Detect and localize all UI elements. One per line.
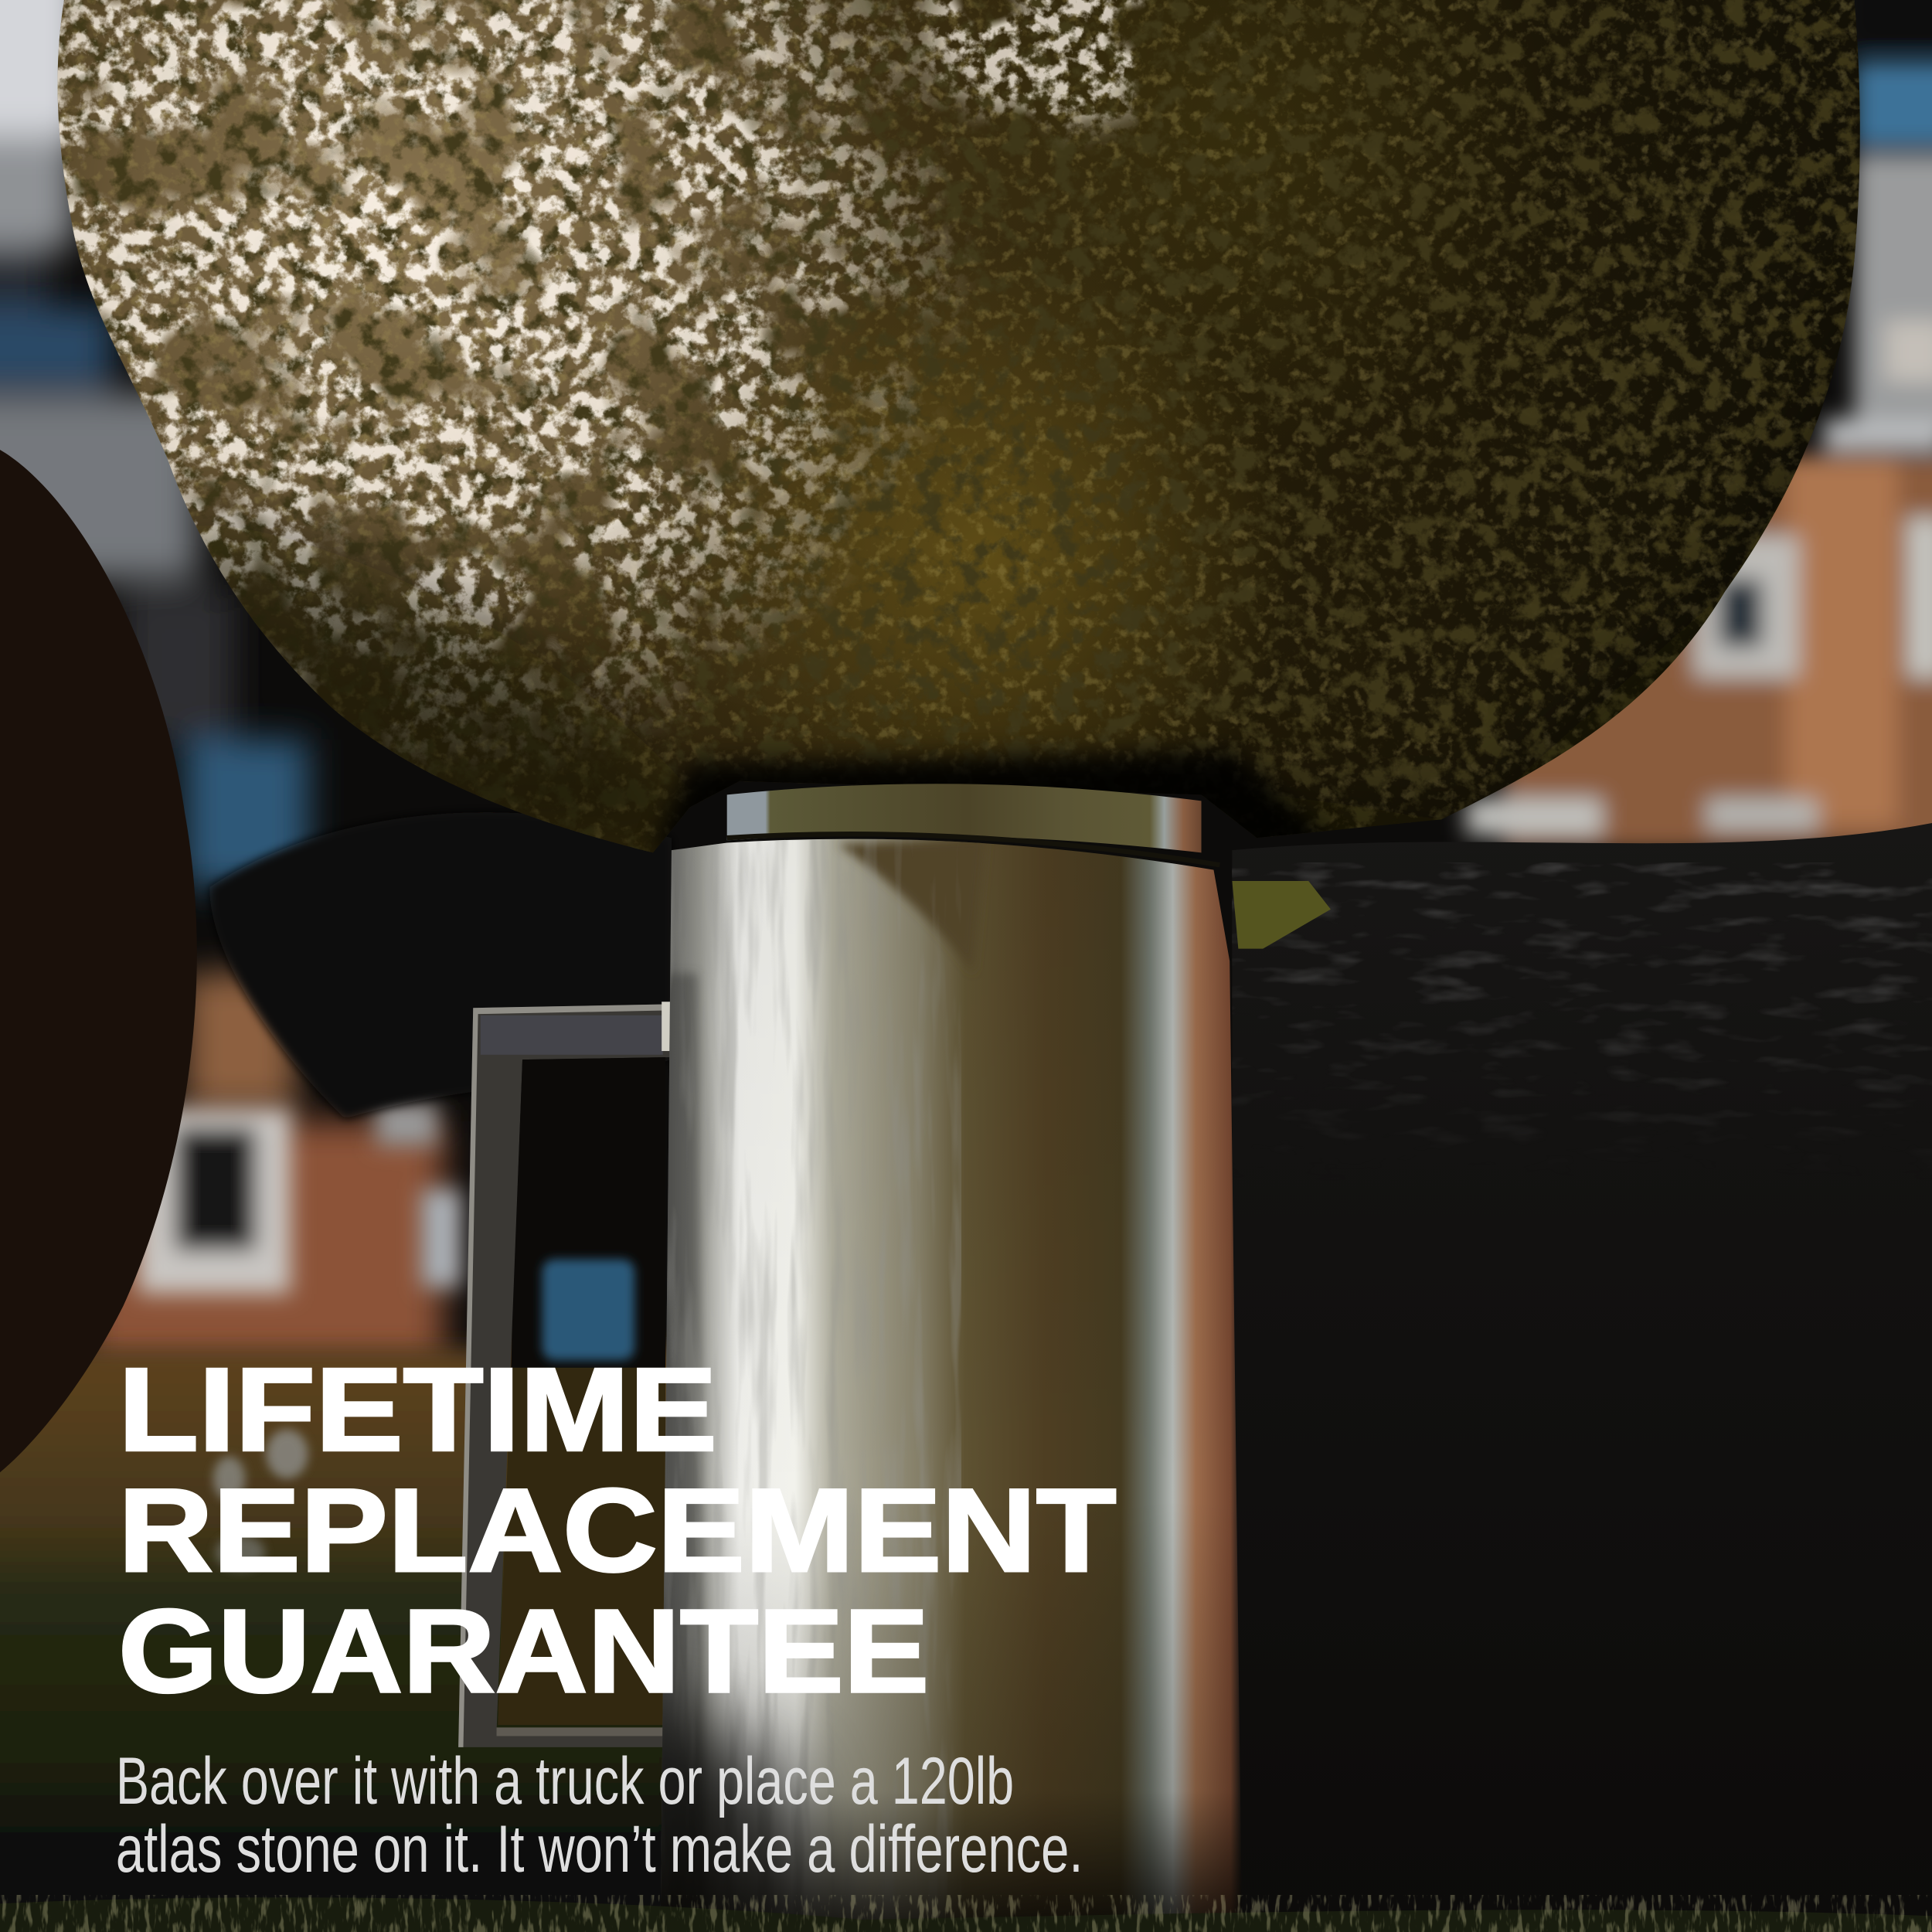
subtitle: Back over it with a truck or place a 120lb xyxy=(116,1744,1014,1818)
mug body xyxy=(628,825,1244,1932)
atlas stone xyxy=(0,0,1932,862)
blurred window left xyxy=(138,1103,461,1294)
ground xyxy=(0,1349,690,1932)
blurred lights xyxy=(213,1429,308,1570)
mug handle xyxy=(458,1002,672,1747)
title xyxy=(118,1344,1117,1717)
subtitle: atlas stone on it. It won’t make a difference. xyxy=(116,1812,1083,1886)
dark stone behind mug xyxy=(209,812,672,1119)
subtitle xyxy=(116,1744,1083,1886)
tire right xyxy=(1232,823,1932,1162)
building right xyxy=(1466,0,1932,850)
grass xyxy=(0,1895,1932,1932)
handle opening xyxy=(498,1057,665,1725)
mug lid xyxy=(727,784,1219,865)
blurred building left xyxy=(0,0,444,1368)
title: LIFETIME xyxy=(118,1344,717,1476)
mug spout xyxy=(1232,881,1331,949)
title: REPLACEMENT xyxy=(118,1464,1117,1597)
title: GUARANTEE xyxy=(118,1585,929,1717)
dark atlas stone left xyxy=(0,450,197,1472)
